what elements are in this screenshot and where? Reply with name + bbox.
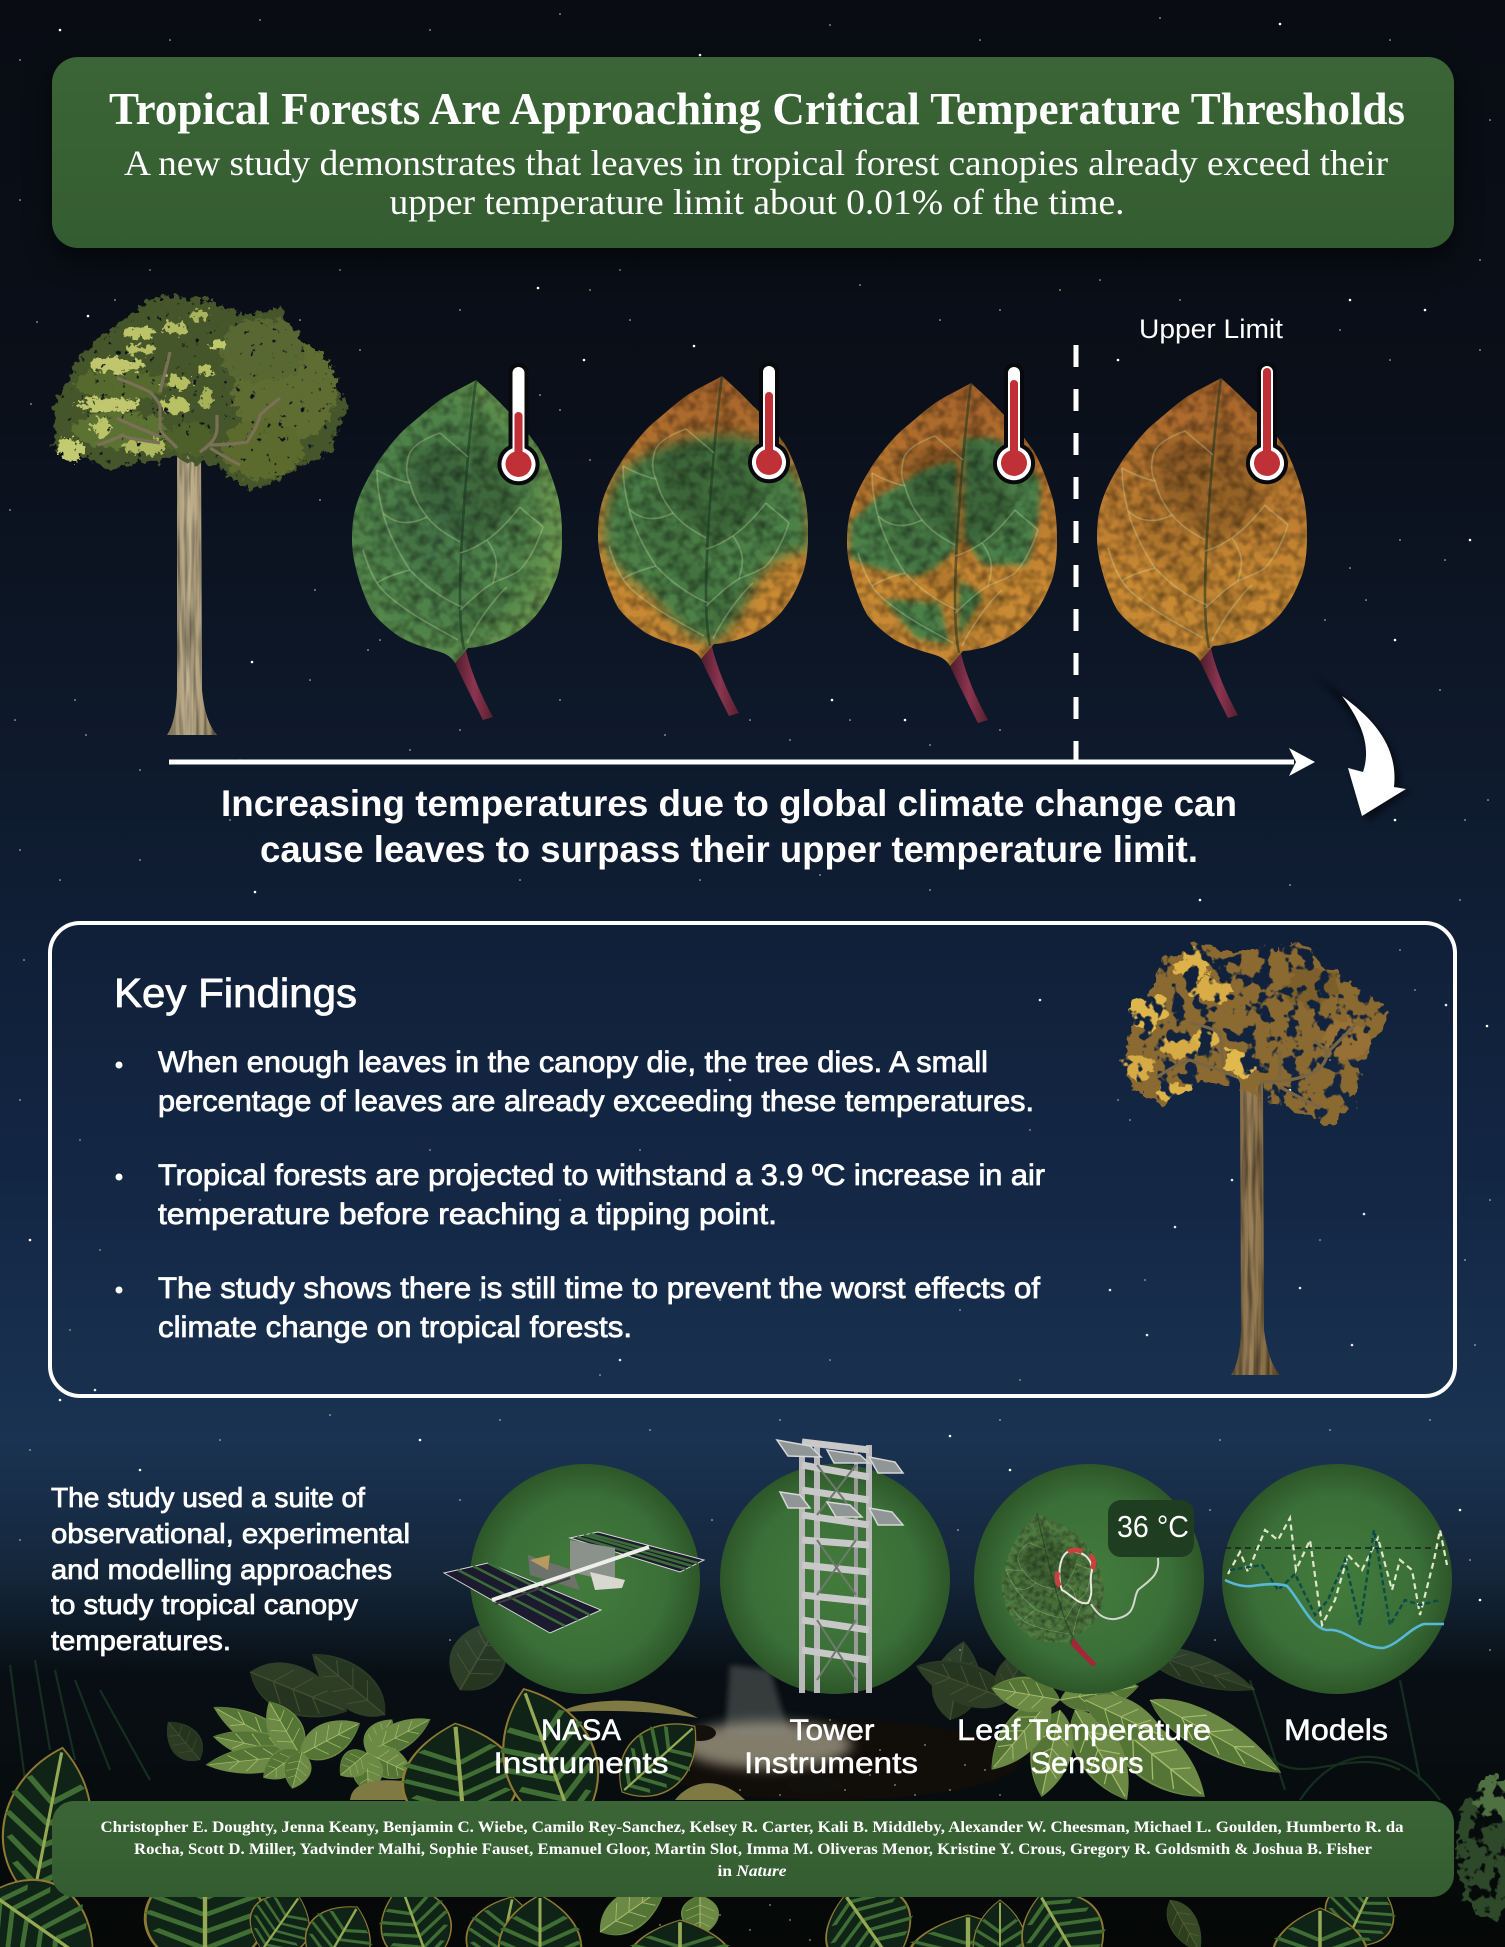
label: models: Models xyxy=(1284,1714,1388,1747)
curved arrow pointing down xyxy=(1315,676,1412,822)
thermometer 3 xyxy=(995,365,1033,482)
dim palm fronds xyxy=(10,1660,1440,1800)
sensor and wire xyxy=(1059,1551,1092,1603)
subtitle: upper temperature limit about 0.01% of the time. xyxy=(390,182,1124,222)
calathea leaves xyxy=(0,1674,716,1908)
bottom row plants xyxy=(0,1855,1407,1947)
light green plant left xyxy=(204,1693,437,1794)
icon: leaf temperature sensor xyxy=(974,1464,1204,1694)
key findings heading: Key Findings xyxy=(114,970,357,1016)
thermometer 2 xyxy=(750,364,788,481)
authors and journal xyxy=(100,1819,1404,1880)
study methods text: to study tropical canopy xyxy=(51,1589,358,1620)
study methods text: The study used a suite of xyxy=(51,1482,365,1513)
authors and journal: in Nature xyxy=(718,1863,787,1880)
small sensor leaf xyxy=(1002,1513,1104,1666)
finding 1: When enough leaves in the canopy die, the tree dies. A small xyxy=(158,1046,988,1079)
study methods text: temperatures. xyxy=(51,1625,231,1656)
label: NASA instruments: NASA xyxy=(541,1714,621,1747)
thermometer 1 xyxy=(500,365,538,483)
label: leaf temperature sensors: Leaf Temperature xyxy=(957,1714,1211,1747)
study methods text: observational, experimental xyxy=(51,1518,410,1549)
study methods text xyxy=(51,1482,410,1656)
icon: model lines chart xyxy=(1222,1464,1452,1694)
leaf 2: browning edges xyxy=(592,376,814,716)
finding 3: climate change on tropical forests. xyxy=(158,1311,632,1344)
label: tower instruments: Tower xyxy=(790,1714,875,1747)
finding 1: percentage of leaves are already exceeding these temperatures. xyxy=(158,1085,1034,1118)
pale leaf accents xyxy=(350,1701,745,1800)
temperature readout xyxy=(1108,1500,1194,1557)
main message xyxy=(221,783,1237,870)
temperature axis arrow xyxy=(169,748,1315,776)
healthy green tree xyxy=(53,298,347,735)
leaf 1: healthy green xyxy=(346,380,568,720)
subtitle xyxy=(124,143,1388,222)
icon: tower instruments xyxy=(720,1440,950,1694)
label: leaf temperature sensors xyxy=(957,1714,1211,1780)
main message: cause leaves to surpass their upper temperature limit. xyxy=(260,829,1198,870)
authors and journal: Christopher E. Doughty, Jenna Keany, Benjamin C. Wiebe, Camilo Rey-Sanchez, Kelsey R. Carter, Kali B. Middleby, Alexander W. Cheesman, Michael L. Goulden, Humberto R. da xyxy=(100,1819,1404,1836)
dying brown tree xyxy=(1119,943,1390,1375)
label: tower instruments: Instruments xyxy=(744,1747,918,1780)
finding 3 xyxy=(116,1272,1041,1344)
label: leaf temperature sensors: Sensors xyxy=(1030,1747,1144,1780)
finding 3: The study shows there is still time to prevent the worst effects of xyxy=(158,1272,1041,1305)
leaf 3: mostly browning xyxy=(841,383,1063,723)
mossy bush right edge xyxy=(1456,1776,1505,1920)
title: Tropical Forests Are Approaching Critical Temperature Thresholds xyxy=(109,84,1405,134)
subtitle: A new study demonstrates that leaves in tropical forest canopies already exceed their xyxy=(124,143,1388,183)
dark background leaves xyxy=(156,1607,1260,1770)
finding 2: temperature before reaching a tipping point. xyxy=(158,1198,777,1231)
leaf 4: fully brown, past upper limit xyxy=(1091,378,1313,718)
upper limit label: Upper Limit xyxy=(1139,314,1284,344)
study methods text: and modelling approaches xyxy=(51,1554,392,1585)
label: tower instruments xyxy=(744,1714,918,1780)
forest floor clearing xyxy=(640,1665,1020,1940)
finding 1 xyxy=(116,1046,1034,1118)
thermometer 4 xyxy=(1248,364,1286,482)
forest foliage backdrop xyxy=(0,1607,1505,1947)
label: NASA instruments xyxy=(494,1714,668,1780)
icon: NASA instruments, space station xyxy=(444,1464,704,1694)
upper limit dashed line xyxy=(1074,345,1078,762)
header panel xyxy=(52,57,1454,261)
panel: key findings xyxy=(50,923,1455,1396)
large leaves right of centre xyxy=(977,1669,1290,1817)
citation panel xyxy=(52,1801,1454,1897)
authors and journal: Rocha, Scott D. Miller, Yadvinder Malhi, Sophie Fauset, Emanuel Gloor, Martin Slot, Imma M. Oliveras Menor, Kristine Y. Crous, Gregory R. Goldsmith & Joshua B. Fisher xyxy=(134,1841,1372,1858)
finding 2: Tropical forests are projected to withstand a 3.9 ºC increase in air xyxy=(158,1159,1045,1192)
label: NASA instruments: Instruments xyxy=(494,1747,668,1780)
main message: Increasing temperatures due to global climate change can xyxy=(221,783,1237,824)
temperature readout: 36 °C xyxy=(1117,1509,1189,1544)
finding 2 xyxy=(116,1159,1045,1231)
